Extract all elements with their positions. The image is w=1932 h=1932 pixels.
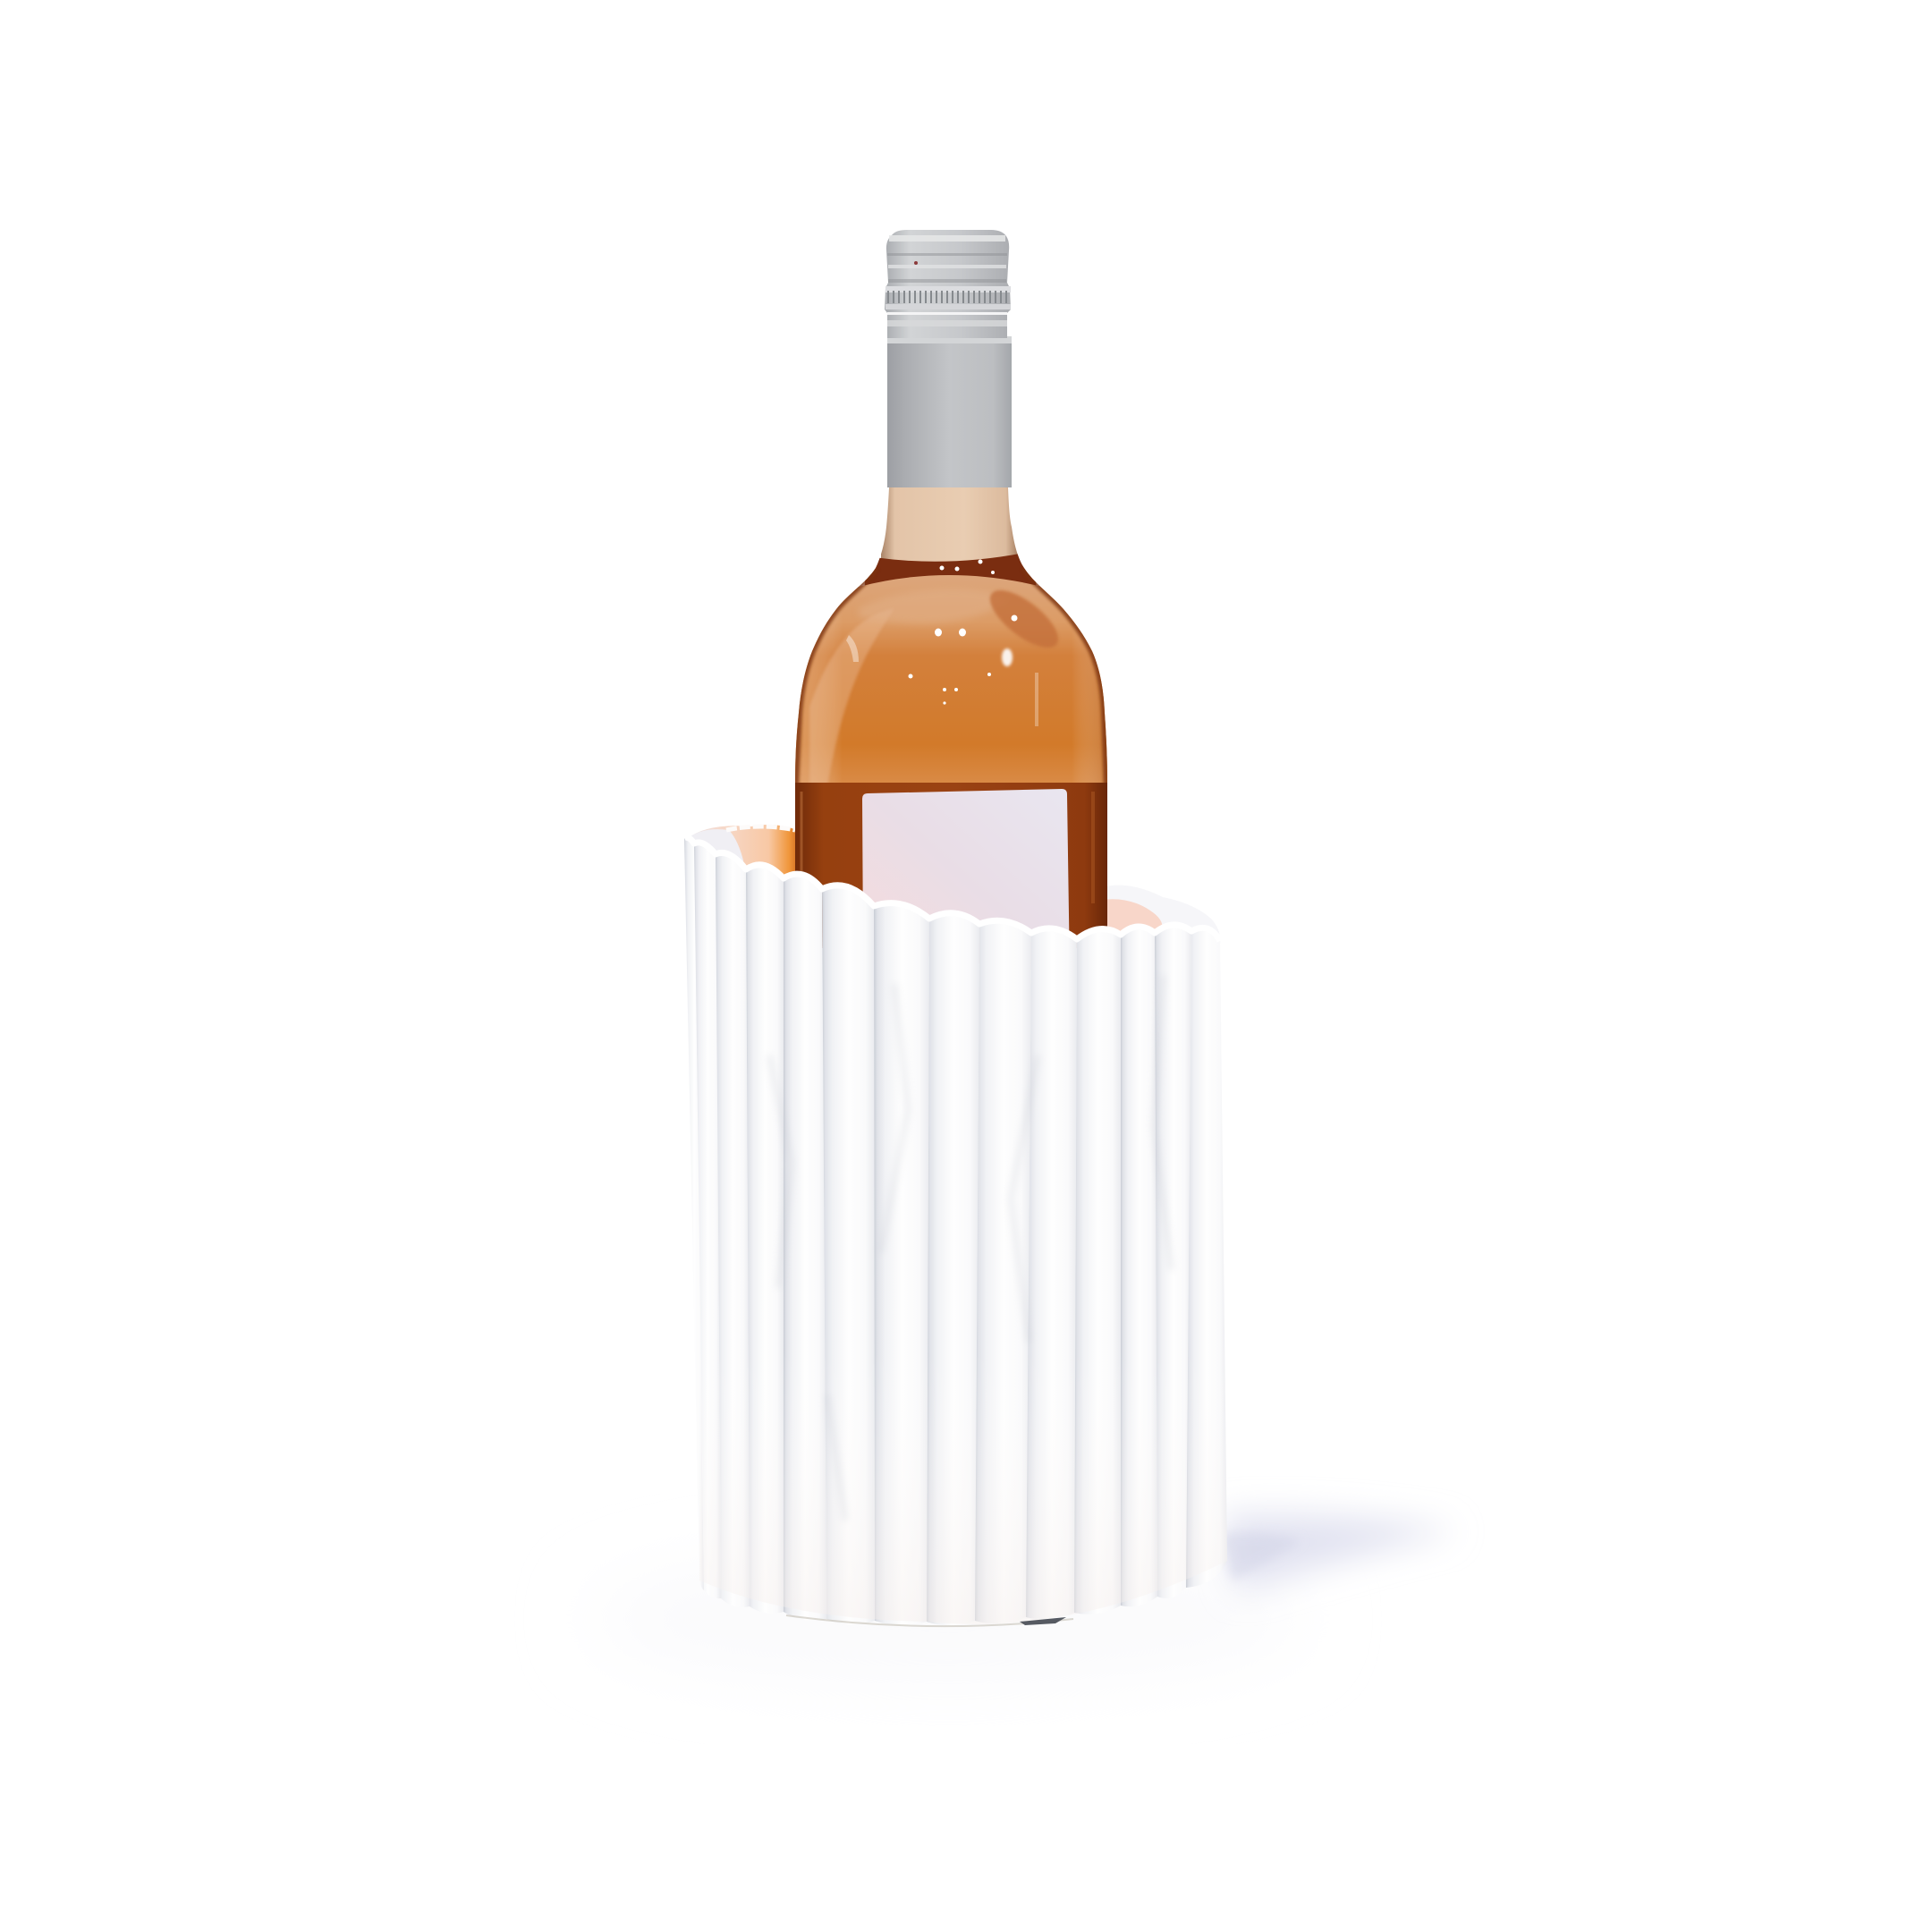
bottle body (787, 487, 1118, 953)
band reflections (800, 792, 803, 894)
dark fill line (864, 554, 1036, 585)
glass outline shading (795, 568, 1107, 787)
wine bottle (787, 230, 1118, 975)
cooler back: inner wall left (687, 825, 801, 887)
highlights (846, 560, 1038, 726)
knurled band (887, 291, 1009, 303)
felt foot (1020, 1617, 1066, 1625)
black gap behind cooler rim (881, 907, 909, 921)
product photo illustration (684, 230, 1428, 1628)
floor shadow (590, 1514, 1458, 1682)
capsule sleeve (887, 336, 1012, 487)
screw cap (885, 230, 1011, 338)
fluted marble cooler (684, 837, 1227, 1626)
marble veins (769, 975, 1172, 1521)
base shadow line (786, 1615, 1073, 1626)
reflection blob right shoulder (988, 589, 1059, 648)
rim highlight (684, 837, 1220, 941)
shoulder reflection (809, 608, 894, 787)
cooler back: inner wall right (1102, 886, 1220, 945)
shoulder and main wine (787, 575, 1118, 787)
blank label (862, 789, 1070, 975)
flutes (684, 837, 1227, 1625)
lower dark band (792, 783, 1110, 953)
neck with pale wine (881, 487, 1020, 568)
lower warm fade (699, 1163, 1227, 1624)
